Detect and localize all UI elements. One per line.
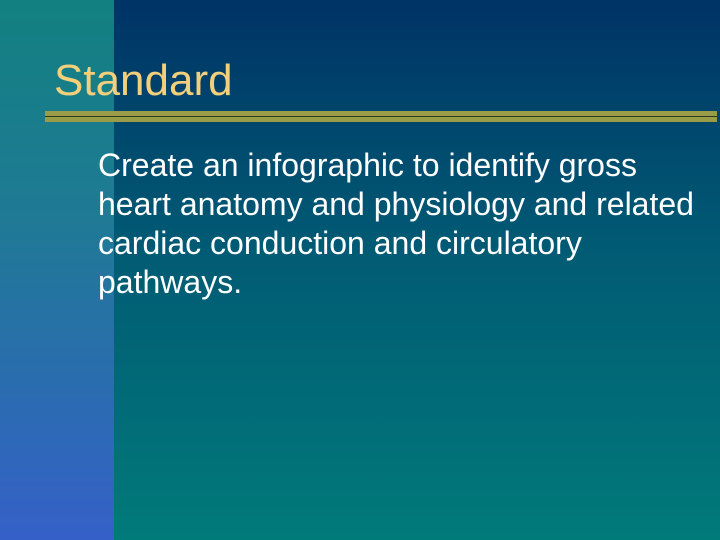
side strip <box>0 0 114 540</box>
body text <box>98 147 694 300</box>
body text: heart anatomy and physiology and related <box>98 186 694 222</box>
body text: cardiac conduction and circulatory <box>98 225 582 261</box>
body text: Create an infographic to identify gross <box>98 147 637 183</box>
body text: pathways. <box>98 264 242 300</box>
title underline rule <box>45 111 717 122</box>
title: Standard <box>54 56 233 105</box>
